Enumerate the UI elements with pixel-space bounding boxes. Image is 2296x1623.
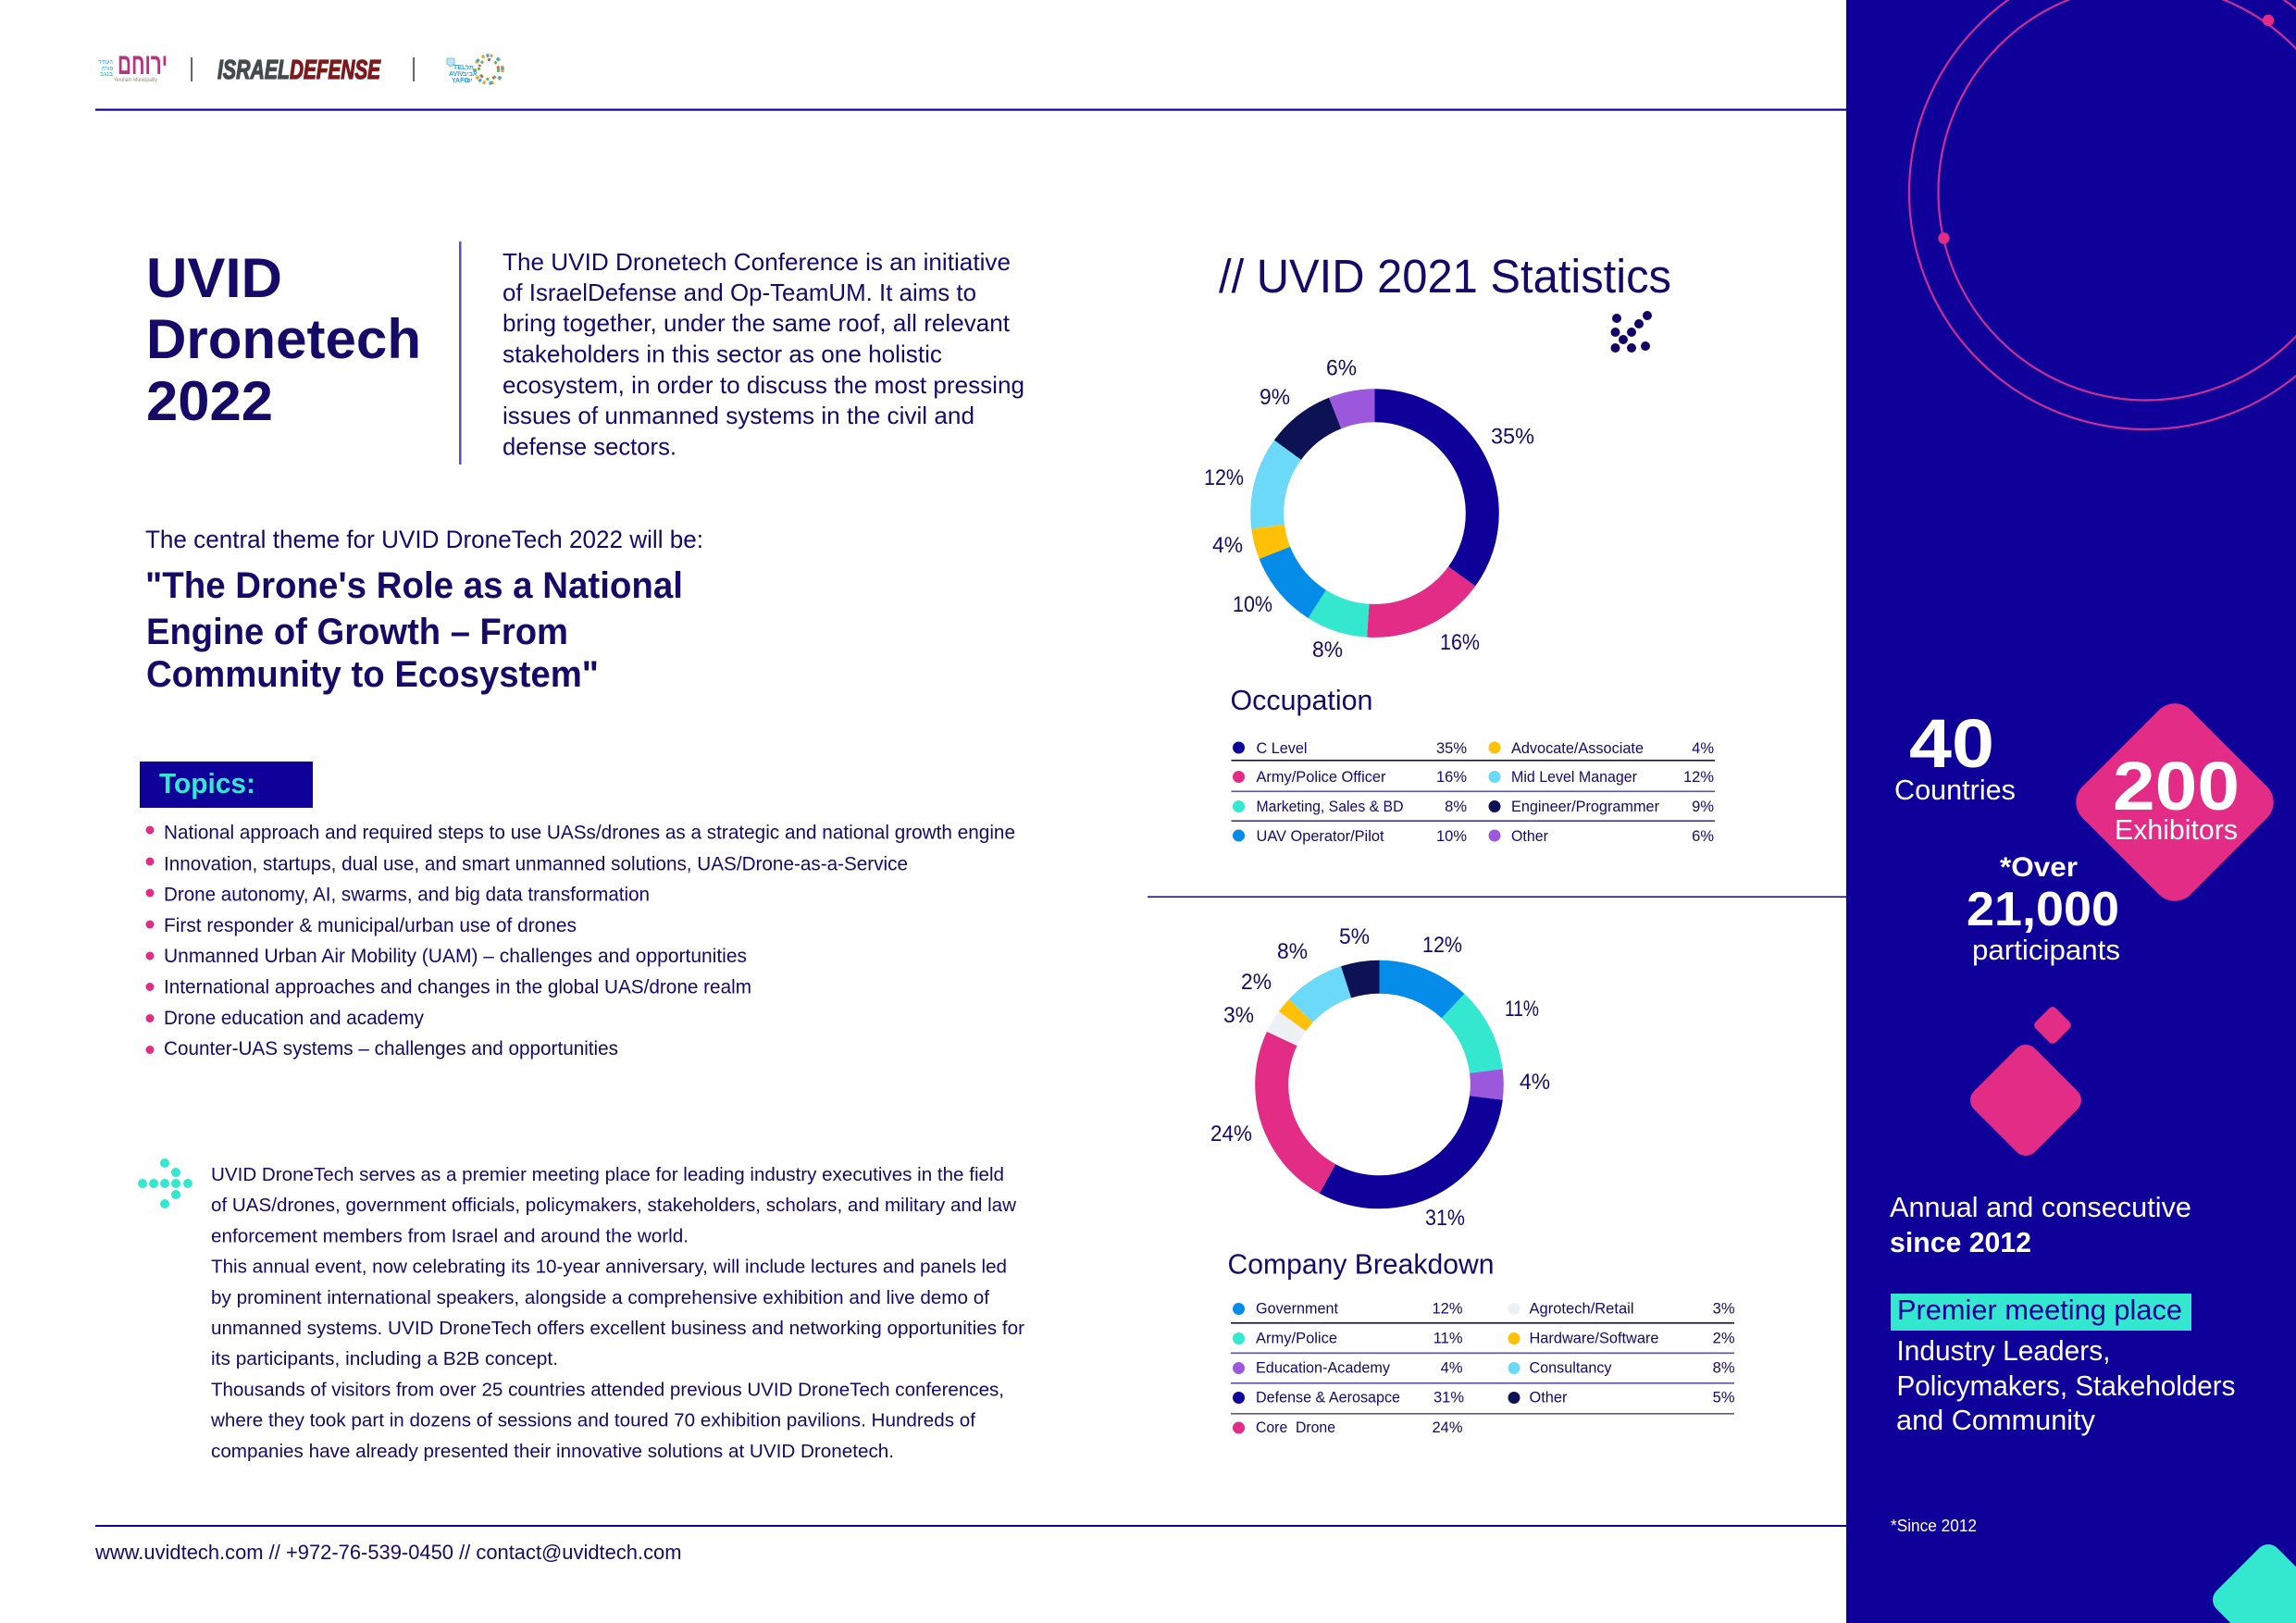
- intro paragraph: [503, 248, 1024, 461]
- logo: Yeruham Municipality: בנגב: [100, 71, 113, 78]
- logo: IsraelDefense: DEFENSE: [290, 56, 381, 85]
- topics list: Innovation, startups, dual use, and smart unmanned solutions, UAS/Drone-as-a-Service: [164, 853, 908, 875]
- logo: IsraelDefense: ISRAEL: [217, 56, 290, 85]
- header rule: [95, 109, 1846, 111]
- theme intro: The central theme for UVID DroneTech 2022 will be:: [145, 526, 703, 553]
- legend: company breakdown: 11%: [1433, 1331, 1463, 1347]
- stat diamond: exhibitors: [2066, 694, 2283, 911]
- audience text: Industry Leaders,: [1897, 1334, 2110, 1367]
- legend: company breakdown: 4%: [1441, 1360, 1463, 1377]
- orbit dot: top right: [2263, 15, 2274, 26]
- icon: scattered dots: [1610, 311, 1652, 353]
- audience text: and Community: [1896, 1404, 2095, 1436]
- title: [146, 247, 421, 432]
- stat: participants: *Over: [2000, 852, 2078, 883]
- legend: company breakdown: Defense & Aerosapce: [1256, 1390, 1400, 1406]
- legend: occupation: [1231, 740, 1715, 845]
- donut chart: occupation: [1267, 405, 1483, 621]
- legend: company breakdown: Other: [1529, 1390, 1568, 1406]
- theme heading: [145, 565, 683, 695]
- intro paragraph: The UVID Dronetech Conference is an initiative: [503, 248, 1011, 276]
- topics badge: Topics:: [159, 767, 255, 799]
- legend: occupation: Marketing, Sales & BD: [1257, 799, 1404, 815]
- donut chart: company breakdown: [1272, 977, 1487, 1192]
- about paragraph: companies have already presented their innovative solutions at UVID Dronetech.: [211, 1441, 894, 1462]
- legend: occupation: Other: [1511, 828, 1548, 845]
- donut labels: occupation: 8%: [1312, 638, 1343, 663]
- legend: company breakdown: Agrotech/Retail: [1529, 1301, 1634, 1318]
- logo: Tel Aviv-Yafo: תל: [465, 64, 474, 71]
- small pink diamond: [2032, 1005, 2073, 1046]
- logo: Tel Aviv-Yafo: YAFO: [452, 78, 469, 84]
- theme heading: Engine of Growth – From: [146, 612, 568, 652]
- legend: occupation: Engineer/Programmer: [1511, 799, 1659, 815]
- legend: company breakdown: 8%: [1713, 1360, 1735, 1377]
- legend: occupation: 4%: [1692, 740, 1714, 757]
- logo: Tel Aviv-Yafo: [447, 56, 503, 84]
- donut labels: occupation: [1204, 355, 1534, 663]
- legend: occupation: Army/Police Officer: [1257, 769, 1386, 786]
- logo: Yeruham Municipality: פורח: [102, 66, 113, 72]
- donut labels: company breakdown: [1210, 924, 1550, 1231]
- chart heading: company breakdown: Company Breakdown: [1227, 1247, 1494, 1281]
- legend: occupation: Mid Level Manager: [1511, 769, 1637, 786]
- legend: occupation: UAV Operator/Pilot: [1257, 828, 1384, 845]
- about paragraph: unmanned systems. UVID DroneTech offers excellent business and networking opportunities for: [211, 1318, 1024, 1339]
- title: UVID: [146, 247, 282, 309]
- footer rule: [95, 1525, 1846, 1527]
- audience text: [1896, 1334, 2236, 1436]
- donut labels: company breakdown: 11%: [1505, 997, 1539, 1022]
- about paragraph: where they took part in dozens of sessions and toured 70 exhibition pavilions. Hundreds of: [210, 1410, 975, 1431]
- topics list: Drone autonomy, AI, swarms, and big data transformation: [164, 885, 650, 905]
- about paragraph: UVID DroneTech serves as a premier meeting place for leading industry executives in the field: [211, 1164, 1004, 1185]
- donut labels: occupation: 4%: [1212, 533, 1243, 558]
- legend: occupation: 35%: [1436, 740, 1467, 757]
- legend: company breakdown: 31%: [1433, 1390, 1464, 1406]
- stat diamond: exhibitors: Exhibitors: [2115, 813, 2238, 846]
- logo separator: [413, 57, 415, 81]
- donut labels: occupation: 10%: [1233, 592, 1272, 617]
- annual text: [1890, 1191, 2191, 1258]
- about paragraph: This annual event, now celebrating its 10-year anniversary, will include lectures and panels led: [211, 1257, 1007, 1278]
- header logos: [98, 47, 503, 85]
- intro paragraph: ecosystem, in order to discuss the most pressing: [503, 371, 1024, 399]
- topics list: Unmanned Urban Air Mobility (UAM) – challenges and opportunities: [164, 946, 747, 967]
- about paragraph: [210, 1164, 1024, 1462]
- title divider: [459, 242, 461, 465]
- annual text: since 2012: [1890, 1226, 2031, 1258]
- legend: company breakdown: 3%: [1713, 1301, 1735, 1318]
- intro paragraph: bring together, under the same roof, all relevant: [503, 309, 1011, 337]
- teal corner diamond: [2207, 1539, 2296, 1623]
- donut labels: company breakdown: 5%: [1339, 924, 1370, 949]
- donut labels: company breakdown: 12%: [1422, 933, 1462, 958]
- logo: Tel Aviv-Yafo: TEL: [453, 65, 466, 71]
- stat: participants: [1967, 852, 2120, 966]
- donut labels: occupation: 35%: [1491, 424, 1534, 450]
- premier meeting place highlight: Premier meeting place: [1897, 1294, 2182, 1326]
- theme heading: "The Drone's Role as a National: [145, 565, 683, 606]
- legend: company breakdown: Education-Academy: [1256, 1360, 1391, 1377]
- annual text: Annual and consecutive: [1890, 1191, 2191, 1223]
- donut labels: occupation: 12%: [1204, 465, 1244, 490]
- audience text: Policymakers, Stakeholders: [1897, 1369, 2236, 1402]
- donut labels: company breakdown: 24%: [1210, 1121, 1252, 1146]
- theme heading: Community to Ecosystem": [146, 654, 599, 695]
- donut labels: occupation: 16%: [1440, 630, 1480, 655]
- topics list: National approach and required steps to use UASs/drones as a strategic and national growth engine: [164, 822, 1015, 844]
- legend: occupation: 10%: [1436, 828, 1467, 845]
- orbit dot: left: [1938, 232, 1950, 244]
- icon: teal dotted arrow: [138, 1158, 192, 1208]
- donut labels: company breakdown: 31%: [1425, 1206, 1465, 1231]
- legend: company breakdown: Army/Police: [1256, 1331, 1337, 1347]
- logo separator: [191, 57, 192, 81]
- logo: Yeruham Municipality: Yeruham Municipality: [114, 77, 158, 83]
- intro paragraph: issues of unmanned systems in the civil and: [503, 402, 974, 429]
- about paragraph: enforcement members from Israel and around the world.: [211, 1225, 689, 1247]
- legend: company breakdown: Government: [1256, 1301, 1338, 1318]
- legend: company breakdown: [1231, 1301, 1735, 1436]
- donut labels: occupation: 6%: [1326, 355, 1357, 381]
- stat: participants: participants: [1972, 934, 2120, 966]
- intro paragraph: defense sectors.: [503, 433, 676, 461]
- legend: occupation: Advocate/Associate: [1511, 740, 1644, 757]
- topics list: Counter-UAS systems – challenges and opportunities: [164, 1038, 618, 1059]
- stat: countries: Countries: [1894, 774, 2016, 806]
- footnote: *Since 2012: [1891, 1517, 1977, 1535]
- donut labels: occupation: 9%: [1260, 385, 1290, 410]
- topics list: First responder & municipal/urban use of drones: [164, 915, 577, 936]
- donut labels: company breakdown: 8%: [1277, 939, 1308, 964]
- statistics heading: // UVID 2021 Statistics: [1219, 250, 1671, 303]
- logo: Yeruham Municipality: ירוחם: [118, 47, 168, 81]
- topics list: Drone education and academy: [164, 1008, 424, 1029]
- legend: occupation: 16%: [1436, 769, 1467, 786]
- legend: occupation: 8%: [1445, 799, 1467, 815]
- intro paragraph: stakeholders in this sector as one holistic: [503, 341, 942, 368]
- decorative orbit rings: [1909, 0, 2296, 429]
- legend: occupation: 6%: [1692, 828, 1714, 845]
- donut labels: company breakdown: 4%: [1520, 1070, 1550, 1095]
- legend: company breakdown: 2%: [1713, 1331, 1735, 1347]
- donut labels: company breakdown: 2%: [1241, 970, 1272, 995]
- legend: occupation: 12%: [1683, 769, 1714, 786]
- legend: occupation: 9%: [1692, 799, 1714, 815]
- topics badge: [140, 762, 313, 808]
- title: 2022: [146, 370, 273, 432]
- stat: countries: 40: [1909, 705, 1994, 782]
- footer contact: www.uvidtech.com // +972-76-539-0450 // contact@uvidtech.com: [94, 1541, 682, 1564]
- donut labels: company breakdown: 3%: [1223, 1003, 1254, 1028]
- statistics divider: [1148, 896, 1846, 898]
- title: Dronetech: [146, 308, 421, 370]
- logo: Tel Aviv-Yafo: יפו: [465, 78, 473, 84]
- legend: company breakdown: Hardware/Software: [1529, 1331, 1658, 1347]
- stat: participants: 21,000: [1967, 883, 2119, 936]
- topics list: International approaches and changes in the global UAS/drone realm: [164, 977, 751, 997]
- logo: Yeruham Municipality: [98, 47, 168, 83]
- legend: company breakdown: 12%: [1432, 1301, 1463, 1318]
- legend: company breakdown: Consultancy: [1529, 1360, 1612, 1377]
- about paragraph: of UAS/drones, government officials, policymakers, stakeholders, scholars, and military and law: [211, 1195, 1016, 1216]
- about paragraph: its participants, including a B2B concept.: [211, 1348, 558, 1369]
- logo: Tel Aviv-Yafo: אביב: [463, 71, 478, 78]
- stat diamond: exhibitors: 200: [2113, 748, 2240, 824]
- logo: Tel Aviv-Yafo: AVIV: [449, 71, 464, 78]
- legend: company breakdown: 24%: [1432, 1419, 1463, 1436]
- intro paragraph: of IsraelDefense and Op-TeamUM. It aims to: [503, 279, 976, 306]
- about paragraph: by prominent international speakers, alongside a comprehensive exhibition and live demo of: [211, 1287, 989, 1308]
- legend: company breakdown: Core Drone: [1256, 1419, 1335, 1436]
- panel: right sidebar: [1846, 0, 2296, 1623]
- topics list: [146, 822, 1015, 1059]
- legend: occupation: C Level: [1257, 740, 1307, 757]
- logo: Yeruham Municipality: העתיד: [98, 59, 113, 66]
- about paragraph: Thousands of visitors from over 25 countries attended previous UVID DroneTech conferences,: [211, 1379, 1004, 1401]
- legend: company breakdown: 5%: [1713, 1390, 1735, 1406]
- logo: IsraelDefense: [217, 56, 381, 85]
- chart heading: occupation: Occupation: [1231, 684, 1373, 716]
- medium pink diamond: [1965, 1039, 2087, 1161]
- stat: countries: [1894, 705, 2016, 806]
